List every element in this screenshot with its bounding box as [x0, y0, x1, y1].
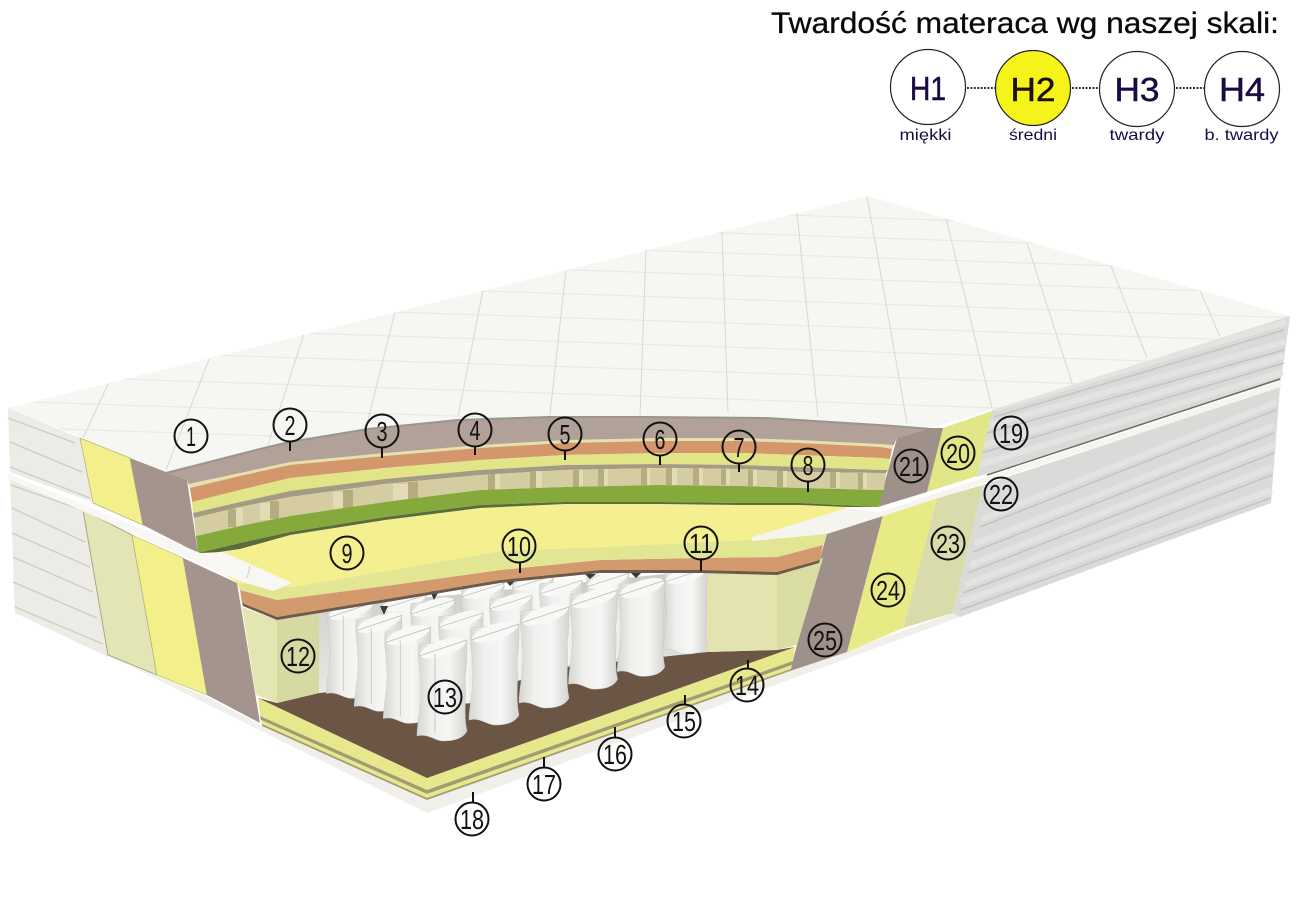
- callout 11: 11: [689, 528, 713, 559]
- quilting lines: [0, 189, 1300, 470]
- callout 22: 22: [989, 479, 1013, 510]
- scale connectors: [967, 87, 1204, 89]
- lower dark seam: [242, 560, 820, 620]
- upper left quilted side: [8, 408, 92, 502]
- H2 medium: H2: [1010, 71, 1056, 108]
- callout 4: [458, 414, 492, 455]
- callout 10: [502, 530, 536, 573]
- pocket springs: [326, 562, 708, 741]
- callout 1: 1: [186, 421, 196, 452]
- callout 8: [792, 448, 824, 492]
- callout 3: 3: [376, 416, 388, 447]
- green layer: [196, 485, 884, 553]
- lower pale yellow layer: [237, 533, 827, 600]
- callout 10: 10: [507, 531, 531, 562]
- callout 8: 8: [802, 450, 814, 481]
- callout 5: 5: [560, 419, 570, 450]
- callout 19: 19: [999, 418, 1023, 449]
- bottom layer stack: [258, 647, 795, 800]
- firmness scale: [771, 7, 1280, 144]
- cream line: [188, 438, 894, 488]
- upper right quilted side: [977, 316, 1290, 477]
- callout 15: 15: [672, 706, 696, 737]
- callout 20: 20: [946, 438, 970, 469]
- lower left yellow foam panel: [132, 535, 207, 695]
- callout 6: 6: [654, 424, 666, 455]
- brown floor layer: [258, 647, 795, 778]
- H3 hard: twardy: [1110, 127, 1164, 144]
- lower left mauve panel: [183, 558, 260, 723]
- H3 hard: [1100, 52, 1174, 144]
- numbered callouts: [174, 408, 1028, 836]
- callout 5: [548, 418, 582, 460]
- H4 very hard: b. twardy: [1204, 127, 1278, 144]
- foam profile highlights: [236, 468, 867, 526]
- callout 13: 13: [433, 682, 457, 713]
- lower right panel 23: [903, 485, 983, 628]
- callout 11: [684, 526, 718, 571]
- H1 soft: miękki: [900, 127, 952, 144]
- H1 soft: H1: [910, 70, 946, 107]
- callout 12: 12: [286, 641, 310, 672]
- H4 very hard: [1204, 52, 1280, 144]
- heading: Twardość materaca wg naszej skali:: [771, 7, 1279, 40]
- callout 16: [598, 727, 632, 770]
- yellow foam surface 9: [198, 504, 847, 587]
- lower left quilted side: [10, 478, 108, 657]
- callout 18: [456, 792, 488, 836]
- callout 9: [330, 536, 364, 570]
- base quilted cover strip: [108, 613, 960, 813]
- lower left pale foam panel: [83, 510, 157, 675]
- foam profile gaps: [228, 468, 863, 527]
- callout 2: [274, 408, 306, 451]
- lower orange layer: [240, 545, 823, 617]
- mattress illustration: [0, 189, 1300, 813]
- orange layer: [190, 441, 892, 502]
- H2 medium: średni: [1009, 127, 1057, 144]
- callout 15: [668, 695, 700, 738]
- curved upper layers: [166, 416, 930, 555]
- callout 6: [644, 422, 676, 465]
- lower right panel 25: [790, 515, 883, 671]
- callout 4: 4: [470, 415, 480, 446]
- upper right yellow panel: [927, 411, 992, 492]
- callout 16: 16: [603, 739, 627, 770]
- callout 9: 9: [342, 538, 352, 569]
- callout 3: [366, 414, 398, 458]
- back wall of spring chamber: [319, 570, 707, 693]
- callout 18: 18: [460, 804, 484, 835]
- callout 7: 7: [734, 432, 744, 463]
- yellow-green layer: [192, 453, 890, 513]
- mauve comfort layer: [166, 416, 930, 488]
- dark underside line: [198, 502, 878, 555]
- upper right mauve panel: [878, 428, 943, 507]
- H3 hard: H3: [1114, 71, 1160, 108]
- callout 23: 23: [936, 528, 960, 559]
- callout 14: [730, 660, 764, 702]
- callout 2: 2: [284, 410, 296, 441]
- H4 very hard: H4: [1219, 71, 1265, 108]
- callout 24: 24: [876, 575, 900, 606]
- profiled foam layer: [194, 468, 886, 536]
- upper left yellow panel: [80, 438, 143, 525]
- callout 25: 25: [813, 625, 837, 656]
- left topper strip: [8, 474, 292, 591]
- quilted top surface: [0, 189, 1300, 473]
- callout 7: [722, 430, 756, 472]
- left foam block: [242, 607, 319, 703]
- callout 17: 17: [532, 769, 556, 800]
- upper left mauve panel: [130, 458, 198, 553]
- lower right quilted side: [953, 387, 1280, 617]
- lower right panel 24: [847, 498, 937, 652]
- H1 soft: [890, 50, 966, 144]
- callout 17: [528, 757, 560, 800]
- right topper strip: [752, 379, 1281, 541]
- callout 14: 14: [735, 670, 759, 701]
- callout 21: 21: [899, 451, 923, 482]
- H2 medium: [996, 50, 1070, 144]
- top edge rim: [166, 417, 930, 473]
- right foam block: [707, 558, 823, 652]
- gray seam: [193, 464, 888, 518]
- callout 1: [174, 420, 208, 452]
